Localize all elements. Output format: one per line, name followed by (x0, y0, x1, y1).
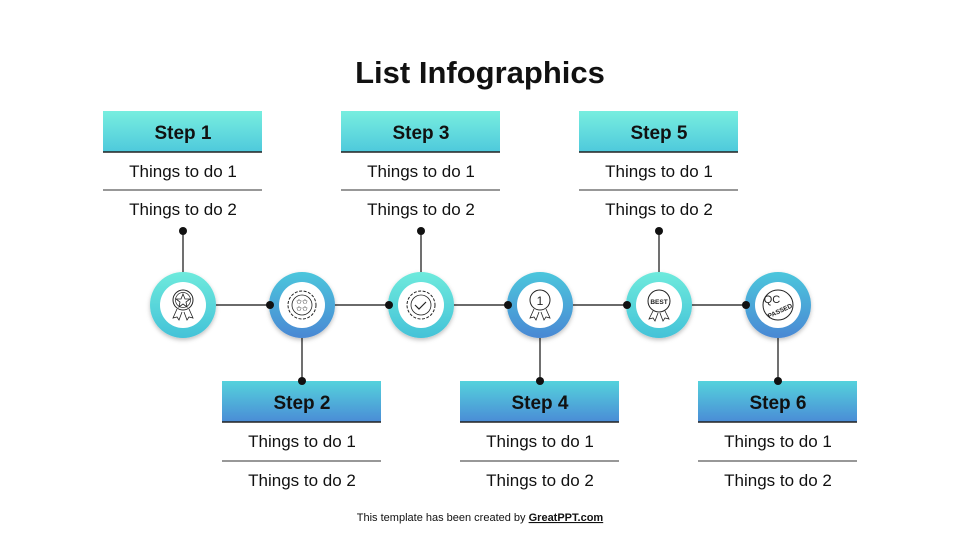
step 4 card: Things to do 2 (486, 471, 594, 490)
timeline line (183, 304, 778, 306)
step 6 card: Step 6 (749, 393, 807, 414)
step 4 card (460, 335, 619, 490)
step 1 card: Things to do 1 (129, 162, 237, 181)
step 1 card (103, 111, 262, 275)
icon circle 2: stars badge (266, 272, 335, 338)
icon circle 1: star medal (150, 272, 216, 338)
icon circle 3: check badge (385, 272, 454, 338)
footer: This template has been created by GreatPPT.com (357, 512, 603, 524)
title: List Infographics (355, 55, 605, 90)
icon circle 4: number one medal (504, 272, 573, 338)
step 6 card (698, 335, 857, 490)
icon circle 2: stars badge: ✩✩ (296, 305, 308, 313)
step 1 card: Step 1 (154, 123, 212, 144)
step 4 card: Step 4 (511, 393, 569, 414)
icon circle 4: number one medal: 1 (537, 294, 544, 308)
step 6 card: Things to do 1 (724, 432, 832, 451)
step 5 card (579, 111, 738, 275)
step 3 card: Step 3 (392, 123, 450, 144)
step 2 card: Step 2 (273, 393, 331, 414)
icon circle 5: best medal (623, 272, 692, 338)
step 1 card: Things to do 2 (129, 200, 237, 219)
step 2 card: Things to do 2 (248, 471, 356, 490)
step 3 card: Things to do 2 (367, 200, 475, 219)
icon circle 6: QC passed: QC (764, 294, 780, 306)
icon circle 6: QC passed (742, 272, 811, 338)
icon circle 6: QC passed: PASSED (767, 303, 794, 320)
icon circle 5: best medal: BEST (650, 299, 668, 306)
step 5 card: Things to do 2 (605, 200, 713, 219)
step 2 card (222, 335, 381, 490)
step 3 card: Things to do 1 (367, 162, 475, 181)
step 6 card: Things to do 2 (724, 471, 832, 490)
step 5 card: Step 5 (630, 123, 688, 144)
step 4 card: Things to do 1 (486, 432, 594, 451)
step 5 card: Things to do 1 (605, 162, 713, 181)
step 3 card (341, 111, 500, 275)
icon circle 2: stars badge: ✩✩ (296, 298, 308, 306)
step 2 card: Things to do 1 (248, 432, 356, 451)
